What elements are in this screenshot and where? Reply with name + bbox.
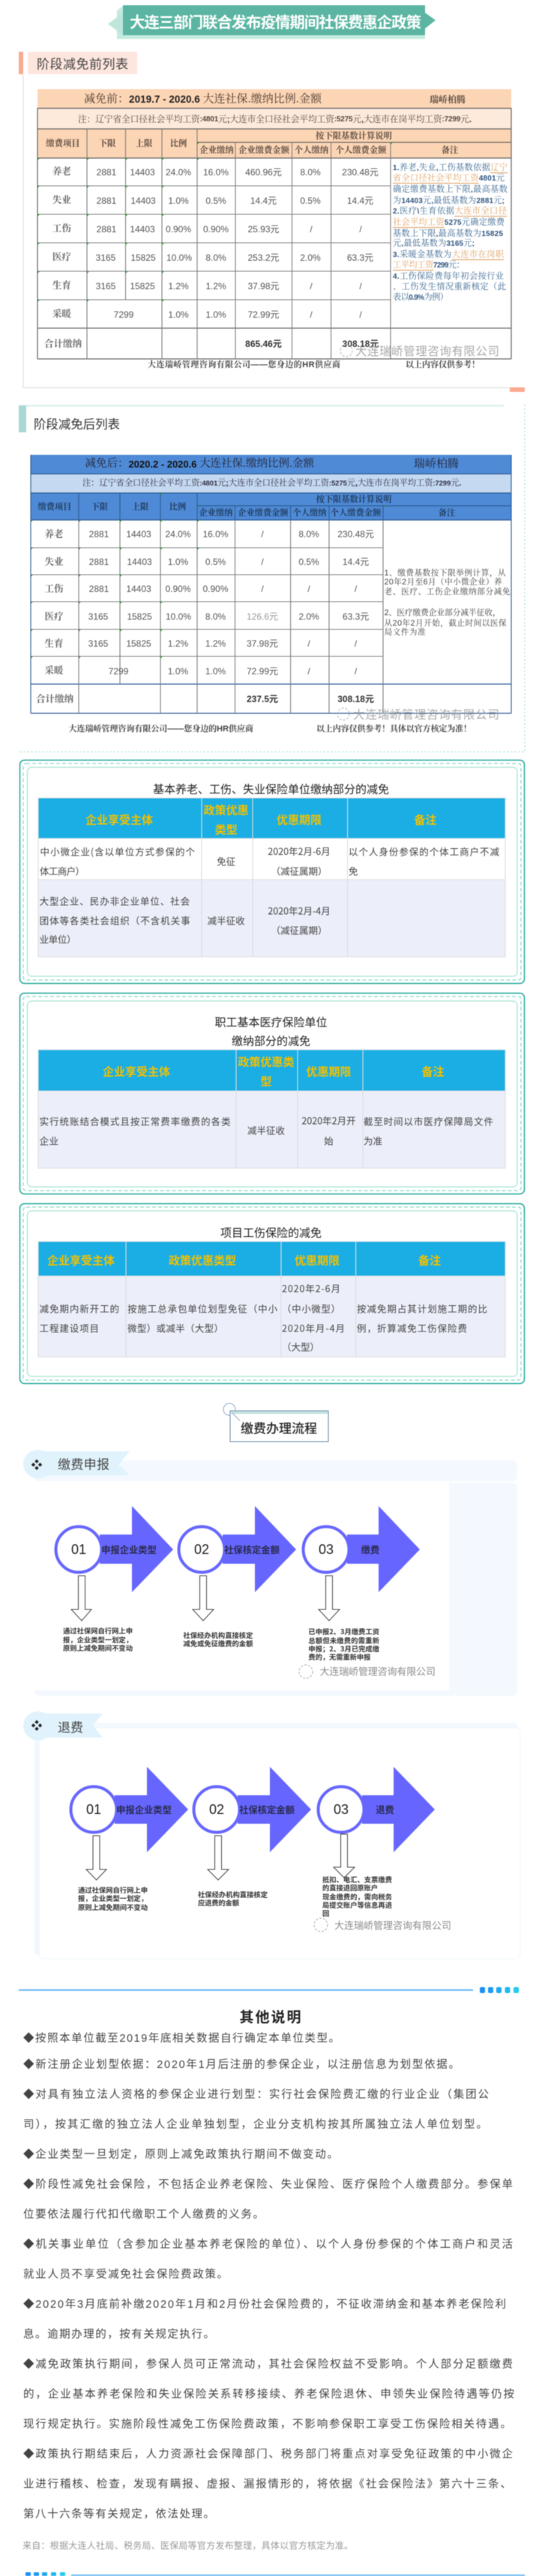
policy table: 以个人身份参保的个体工商户不减 (349, 844, 499, 859)
policy table: 减半征收 (247, 1122, 285, 1137)
policy table: 企业享受主体 (47, 1253, 115, 1268)
tag: 缴费申报: ❖ (31, 1457, 43, 1473)
step 03 (318, 1767, 435, 1918)
data rows: 7299 (109, 666, 129, 677)
data rows: 10.0% (166, 611, 191, 622)
policy table: 团体等各类社会组织（不含机关事 (40, 913, 190, 928)
step 01: 01 (71, 1542, 86, 1557)
text block: other notes: 第八十六条等有关规定，依法处理。 (23, 2507, 214, 2521)
data rows: 1.2% (205, 281, 226, 291)
step 03: 申报；2、3月已完成缴 (308, 1643, 380, 1654)
data rows: 37.98元 (247, 281, 280, 291)
heading: 缴费办理流程 (223, 1403, 328, 1442)
policy table: 优惠期限 (277, 812, 322, 827)
text block: other notes: 现行规定执行。实施阶段性减免工伤保险费政策，不影响参保职工享受工伤保险相关待遇。 (23, 2418, 511, 2431)
data rows: / (359, 309, 362, 320)
data rows: 14403 (126, 584, 151, 594)
policy table: 免 (349, 863, 358, 878)
watermark: 大连瑞峤管理咨询有限公司 (334, 1918, 451, 1932)
data rows: 15825 (126, 638, 151, 649)
policy table: 类型 (215, 821, 238, 838)
remarks column: 工平均工资7299元： (393, 259, 465, 270)
data rows: 养老 (44, 528, 64, 539)
remarks column: 省全口径社会平均工资4801元 (393, 172, 505, 183)
data rows: 生育 (44, 638, 64, 649)
column headers: 缴费项目 (46, 138, 80, 148)
column headers: 上限 (136, 138, 153, 148)
policy table: 政策优惠 (204, 802, 249, 818)
data rows: 1.2% (168, 638, 189, 649)
data rows: 24.0% (165, 529, 191, 539)
step 02: 02 (209, 1802, 224, 1817)
data rows: 0.5% (300, 196, 321, 206)
policy table: 业单位） (40, 932, 76, 946)
data rows (44, 166, 379, 349)
policy table (38, 1050, 505, 1168)
data rows: / (310, 309, 313, 320)
remarks column: 社会平均工资5275元确定缴费 (393, 217, 505, 227)
step 01: 报，企业类型一划定， (78, 1893, 148, 1903)
policy table: （减征属期） (271, 923, 328, 937)
policy table: 工程建设项目 (40, 1320, 99, 1335)
column headers (38, 494, 455, 518)
column headers: 比例 (170, 138, 187, 148)
data rows: / (261, 584, 264, 594)
step 02 (178, 1506, 296, 1648)
step 03: 缴费 (361, 1543, 379, 1556)
data rows: 采暖 (52, 308, 71, 319)
policy table: 为准 (364, 1133, 382, 1148)
table title: 减免前：2019.7 - 2020.6 大连社保.缴纳比例.金额 (84, 91, 322, 105)
step 03: 抵扣、电汇、支票缴费 (322, 1874, 392, 1884)
policy table: 政策优惠类型 (169, 1253, 236, 1268)
text block: other notes: ◆2020年3月底前补缴2020年1月和2月份社会保险费的，不征收滞纳金和基本养老保险利 (23, 2298, 506, 2311)
policy table: 企业 (40, 1133, 58, 1148)
data rows: 16.0% (202, 529, 229, 539)
remarks column: 元,最低基数为3165元; (393, 238, 475, 248)
table title: 减免后：2020.2 - 2020.6 大连社保.缴纳比例.金额 (85, 456, 315, 470)
step 02: 社保核定金额 (224, 1543, 280, 1556)
data rows: 308.18元 (337, 694, 374, 704)
data rows: / (307, 666, 310, 677)
data rows: 0.90% (166, 224, 191, 235)
brand label: 瑞峤柏腾 (430, 94, 466, 105)
remarks column: 基数上下限,最高基数为15825 (393, 228, 503, 238)
column headers: 上限 (132, 501, 148, 512)
remarks column: 1.养老,失业,工伤基数依据辽宁 (393, 162, 508, 172)
data rows: 3165 (88, 611, 109, 622)
policy table: 免征 (217, 854, 236, 868)
step 02: 社保核定金额 (239, 1803, 295, 1816)
policy table: 政策优惠类 (238, 1053, 295, 1070)
table footer: 大连瑞峤管理咨询有限公司——您身边的HR供应商 (148, 359, 340, 369)
remarks column: 1、缴费基数按下限举例计算，从 (385, 568, 506, 578)
data rows: 0.5% (205, 196, 226, 206)
bottom divider with blocks (25, 2572, 525, 2576)
data rows: 14.4元 (347, 196, 373, 206)
policy table: 备注 (421, 1064, 445, 1079)
remarks column: 从20年2月开始，截止时间以医保 (385, 618, 507, 628)
data rows: 63.3元 (347, 253, 373, 263)
policy table: （减征属期） (271, 863, 328, 878)
data rows: / (359, 281, 362, 291)
policy table: 优惠期限 (306, 1064, 352, 1079)
data rows: 2.0% (300, 253, 321, 263)
step 02: 社保经办机构直接核定 (183, 1630, 253, 1640)
text block: other notes: ◆新注册企业划型依据：2020年1月后注册的参保企业，以注册信息为划型依据。 (23, 2058, 460, 2071)
data rows: 失业 (52, 194, 71, 205)
remarks column: 确定缴费基数上下限,最高基数 (393, 184, 508, 194)
policy table: 2020年月-4月 (282, 1320, 345, 1335)
step 01: 申报企业类型 (116, 1803, 172, 1816)
tag: 退费 (23, 1711, 103, 1741)
title banner (108, 5, 436, 39)
table footer: 大连瑞峤管理咨询有限公司——您身边的HR供应商 (69, 723, 253, 734)
data rows: 工伤 (52, 223, 71, 234)
data rows: 1.0% (205, 666, 226, 677)
heading: 阶段减免前列表: 阶段减免前列表 (37, 54, 128, 72)
column headers: 个人缴纳 (295, 145, 328, 155)
data rows: / (310, 224, 313, 235)
policy table: 始 (324, 1133, 334, 1148)
text block: other notes: 的，企业基本养老保险和失业保险关系转移接续、养老保险退休、申领失业保险待遇等仍按 (23, 2387, 514, 2401)
data rows: 15825 (130, 281, 155, 291)
text block: other notes: ◆政策执行期结束后，人力资源社会保障部门、税务部门将重点对享受免征政策的中小微企 (23, 2447, 513, 2461)
policy table: 大型企业、民办非企业单位、社会 (40, 893, 190, 908)
data rows: 72.99元 (247, 309, 280, 320)
watermark: 大连瑞峤管理咨询有限公司 (353, 706, 499, 722)
watermark: 大连瑞峤管理咨询有限公司 (355, 342, 499, 359)
data rows: 865.46元 (245, 339, 282, 349)
tag: 退费: 退费 (58, 1717, 83, 1735)
tag: 缴费申报 (23, 1450, 130, 1478)
text block: other notes: 位要依法履行代扣代缴职工个人缴费的义务。 (23, 2208, 264, 2221)
data rows: / (355, 666, 358, 677)
text block: other notes (23, 2032, 514, 2521)
tag: 退费: ❖ (31, 1717, 43, 1734)
panel title: 职工基本医疗保险单位 (214, 1015, 328, 1030)
text block: other notes: 息。逾期办理的，按有关规定执行。 (23, 2328, 214, 2341)
column headers: 企业缴费金额 (238, 145, 290, 155)
policy table: 企业享受主体 (85, 812, 153, 827)
data rows: 15825 (127, 611, 152, 622)
column headers: 企业缴纳 (199, 145, 234, 155)
policy table: 备注 (418, 1253, 441, 1268)
data rows: 8.0% (298, 529, 319, 539)
policy table (38, 1242, 505, 1357)
policy table: 体工商户） (40, 863, 85, 878)
remarks column: 3.采暖金基数为大连市在岗职 (393, 249, 505, 259)
divider with blocks (19, 1987, 519, 1993)
policy table: 减免期内新开工的 (40, 1301, 119, 1316)
policy table: 2020年2月开 (301, 1113, 356, 1127)
policy table: 微型）或减半（大型） (127, 1320, 223, 1335)
column headers: 缴费项目 (38, 501, 71, 512)
heading: 缴费办理流程: 缴费办理流程 (241, 1418, 317, 1437)
policy table: 企业享受主体 (103, 1064, 170, 1079)
data rows: 0.90% (203, 224, 229, 235)
step 03: 现金缴费的，需向税务 (322, 1891, 393, 1902)
data rows: 126.6元 (247, 611, 278, 622)
data rows: 8.0% (205, 253, 226, 263)
data rows: 2881 (89, 557, 109, 567)
data rows: / (355, 584, 358, 594)
data rows: / (307, 584, 310, 594)
data rows: 生育 (52, 279, 71, 291)
data rows: 14403 (127, 557, 152, 567)
column headers: 按下限基数计算说明 (316, 130, 392, 141)
data rows: 14403 (130, 196, 156, 206)
panel: payment declaration flow (23, 1450, 517, 1696)
step 01: 原则上减免期间不变动 (63, 1642, 133, 1653)
data rows: 237.5元 (247, 694, 278, 704)
data rows: 合计缴纳 (44, 338, 82, 349)
data rows: 24.0% (166, 167, 191, 178)
step 03: 的直接退回原账户 (322, 1882, 378, 1893)
data rows: 2881 (97, 224, 117, 235)
policy table: 中小微企业(含以单位方式参保的个 (40, 844, 195, 859)
column headers: 个人缴纳 (293, 507, 326, 518)
data rows: 1.0% (168, 196, 189, 206)
tag: 缴费申报: 缴费申报 (58, 1454, 109, 1473)
watermark: 大连瑞峤管理咨询有限公司 (319, 1663, 436, 1678)
step 03 (303, 1506, 420, 1662)
data rows: 采暖 (44, 665, 64, 676)
panel: refund flow (23, 1711, 520, 1959)
step 03: 退费 (376, 1803, 394, 1816)
policy table: 实行统账结合模式且按正常费率缴费的各类 (40, 1113, 231, 1128)
policy table: 截至时间以市医疗保障局文件 (364, 1113, 493, 1128)
policy table: （中小微型） (282, 1301, 340, 1316)
step 01: 通过社保网自行网上申 (78, 1884, 148, 1895)
column headers (46, 130, 459, 155)
heading: 其他说明: 其他说明 (239, 2007, 303, 2026)
data rows: 0.5% (205, 557, 226, 567)
panel: medical insurance reduction (19, 994, 525, 1194)
data rows: 0.90% (165, 584, 191, 594)
step 02: 减免或免征缴费的金额 (183, 1638, 253, 1648)
title banner: 大连三部门联合发布疫情期间社保费惠企政策 (130, 10, 421, 32)
data rows: 2881 (89, 529, 109, 539)
wage note: 注：辽宁省全口径社会平均工资:4801元;大连市全口径社会平均工资:5275元,大连市在岗平均工资:7299元. (78, 114, 472, 124)
step 01: 原则上减免期间不变动 (78, 1902, 148, 1912)
column headers: 企业缴费金额 (238, 507, 289, 518)
policy table: 减半征收 (208, 913, 245, 928)
policy table (38, 798, 505, 957)
data rows: / (355, 638, 358, 649)
step 02: 02 (194, 1542, 209, 1557)
data rows: 308.18元 (343, 339, 379, 349)
data rows: 1.0% (168, 309, 189, 320)
data rows: 失业 (44, 556, 64, 567)
remarks column: 2、医疗缴费企业部分减半征收， (385, 608, 501, 617)
heading: 阶段减免后列表: 阶段减免后列表 (34, 414, 120, 432)
remarks column: 20年2月至6月（中小微企业）养 (385, 577, 502, 587)
step 01: 报，企业类型一划定， (63, 1634, 133, 1645)
remarks column: 2.医疗\生育依据大连市全口径 (393, 205, 508, 216)
policy table: 2020年2-6月 (282, 1281, 340, 1295)
data rows: 3165 (88, 638, 109, 649)
step 01: 01 (86, 1802, 101, 1817)
remarks column: 局文件为准 (385, 627, 426, 637)
brand label: 瑞峤柏腾 (414, 457, 459, 471)
data rows: 16.0% (203, 167, 229, 178)
step 01 (55, 1506, 173, 1653)
data rows: 37.98元 (247, 638, 278, 649)
step 03: 回 (322, 1908, 329, 1918)
policy table: 优惠期限 (295, 1253, 340, 1268)
policy table: （大型） (282, 1340, 319, 1353)
data rows: / (310, 281, 313, 291)
panel: pension, injury, unemployment reduction (19, 760, 525, 983)
text block: other notes: ◆按照本单位截至2019年底相关数据自行确定本单位类型。 (23, 2032, 340, 2045)
data rows: 0.5% (298, 557, 319, 567)
data rows: 14403 (130, 167, 155, 178)
data rows: 2881 (97, 167, 117, 178)
data rows: 253.2元 (247, 253, 280, 263)
data rows: / (359, 224, 362, 235)
step 02: 社保经办机构直接核定 (198, 1889, 268, 1899)
data rows: / (307, 638, 310, 649)
policy table: 2020年2月-4月 (268, 904, 331, 917)
data rows: 1.0% (168, 666, 189, 677)
data rows: / (261, 557, 264, 567)
column headers: 按下限基数计算说明 (316, 494, 391, 504)
text block: other notes: ◆对具有独立法人资格的参保企业进行划型：实行社会保险费汇缴的行业企业（集团公 (23, 2087, 489, 2101)
data rows: 1.2% (168, 281, 189, 291)
data rows: 工伤 (44, 583, 64, 594)
data rows: 3165 (96, 281, 116, 291)
remarks column: 4.工伤保险费每年初会按行业 (393, 270, 504, 281)
table: before reduction rates (37, 89, 511, 369)
policy table: 型 (260, 1073, 272, 1089)
policy table: 按施工总承包单位划型免征（中小 (127, 1301, 277, 1316)
data rows: 1.0% (205, 309, 226, 320)
data rows: 2.0% (298, 611, 319, 622)
policy table: 按减免期占其计划施工期的比 (357, 1301, 487, 1316)
column headers: 备注 (442, 145, 459, 155)
text block: other notes: ◆企业类型一旦划定，原则上减免政策执行期间不做变动。 (23, 2147, 338, 2161)
text block: other notes: 司），按其汇缴的独立法人企业单独划型，企业分支机构按其所属独立法人单位划型。 (23, 2117, 487, 2131)
data rows: 230.48元 (337, 529, 374, 539)
step 03: 费的，无需重新申报 (308, 1651, 371, 1662)
step 03: 已申报2、3月缴费工资 (308, 1626, 379, 1636)
column headers: 个人缴费金额 (336, 145, 387, 155)
data rows: 14.4元 (250, 196, 277, 206)
data rows: 合计缴纳 (36, 693, 73, 704)
panel title (214, 1015, 328, 1049)
step 03: 03 (319, 1542, 334, 1557)
data rows: 14403 (126, 529, 151, 539)
column headers: 下限 (91, 501, 108, 512)
section frame: before reduction (19, 52, 525, 392)
wage note: 注：辽宁省全口径社会平均工资:4801元;大连市全口径社会平均工资:5275元,大连市在岗平均工资:7299元. (82, 477, 462, 488)
section frame: after reduction (19, 405, 525, 752)
text block: other notes: ◆阶段性减免社会保险，不包括企业养老保险、失业保险、医疗保险个人缴费部分。参保单 (23, 2177, 513, 2191)
remarks column (385, 568, 511, 637)
step 01: 申报企业类型 (101, 1543, 157, 1556)
data rows: 3165 (96, 253, 116, 263)
data rows: 460.96元 (245, 167, 282, 178)
remarks column: 表以0.9%为例） (393, 291, 448, 302)
step 01: 通过社保网自行网上申 (63, 1625, 133, 1636)
policy table: 备注 (414, 812, 437, 827)
data rows: 230.48元 (342, 167, 379, 178)
data rows: 72.99元 (247, 666, 278, 677)
data rows: 8.0% (300, 167, 321, 178)
text block: other notes: 业进行稽核、检查，发现有瞒报、虚报、漏报情形的，将依据《社会保险法》第六十三条、 (23, 2477, 511, 2491)
data rows: 14.4元 (343, 557, 369, 567)
table: after reduction rates (31, 455, 511, 734)
disclaimer: 以上内容仅供参考！具体以官方核定为准！ (316, 723, 472, 734)
data rows: 25.93元 (247, 224, 280, 235)
remarks column: 为14403元,最低基数为2881元; (393, 195, 505, 205)
data rows: 7299 (114, 309, 134, 320)
panel: project work injury reduction (19, 1203, 525, 1383)
data rows: 0.90% (202, 584, 229, 594)
step 01 (70, 1767, 188, 1912)
data rows: 养老 (52, 166, 71, 177)
text block: other notes: ◆机关事业单位（含参加企业基本养老保险的单位）、以个人身份参保的个体工商户和灵活 (23, 2237, 513, 2251)
remarks column: 老、医疗、工伤企业缴纳部分减免 (385, 587, 511, 596)
text block: other notes: ◆减免政策执行期间，参保人员可正常流动，其社会保险权益不受影响。个人部分足额缴费 (23, 2358, 513, 2371)
step 02 (193, 1767, 311, 1908)
remarks column: 、工伤发生情况重新核定（此 (393, 281, 506, 291)
step 03: 总额但未缴费的需重新 (308, 1635, 379, 1645)
column headers: 个人缴费金额 (331, 507, 382, 518)
text block: other notes: 就业人员不享受减免社会保险费政策。 (23, 2268, 228, 2281)
disclaimer: 以上内容仅供参考！ (406, 359, 480, 369)
heading: 阶段减免前列表 (28, 52, 137, 74)
remarks column (393, 162, 508, 302)
data rows: 医疗 (52, 252, 71, 262)
column headers: 下限 (99, 138, 116, 148)
column headers: 比例 (169, 501, 186, 512)
policy table: 例，折算减免工伤保险费 (357, 1320, 467, 1335)
step 03: 局提交账户等信息再退 (322, 1899, 393, 1910)
panel title: 基本养老、工伤、失业保险单位缴纳部分的减免 (153, 781, 389, 797)
step 02: 应退费的金额 (198, 1897, 240, 1908)
step 03: 03 (334, 1802, 349, 1817)
data rows: 1.2% (205, 638, 226, 649)
panel title: 项目工伤保险的减免 (220, 1224, 322, 1241)
data rows (36, 528, 374, 704)
data rows: 14403 (130, 224, 155, 235)
data rows: 63.3元 (343, 611, 369, 622)
data rows: 8.0% (205, 611, 226, 622)
data rows: 10.0% (166, 253, 192, 263)
policy table: 2020年2月-6月 (268, 844, 331, 858)
column headers: 企业缴纳 (199, 507, 232, 518)
data rows: 2881 (97, 196, 117, 206)
source note: 来自：根据大连人社局、税务局、医保局等官方发布整理，具体以官方核定为准。 (22, 2539, 353, 2552)
data rows: / (261, 529, 264, 539)
data rows: 2881 (89, 584, 109, 594)
panel title: 缴纳部分的减免 (232, 1032, 310, 1049)
data rows: 1.0% (168, 557, 189, 567)
column headers: 备注 (439, 507, 455, 518)
data rows: 医疗 (44, 611, 64, 622)
data rows: 15825 (130, 253, 156, 263)
